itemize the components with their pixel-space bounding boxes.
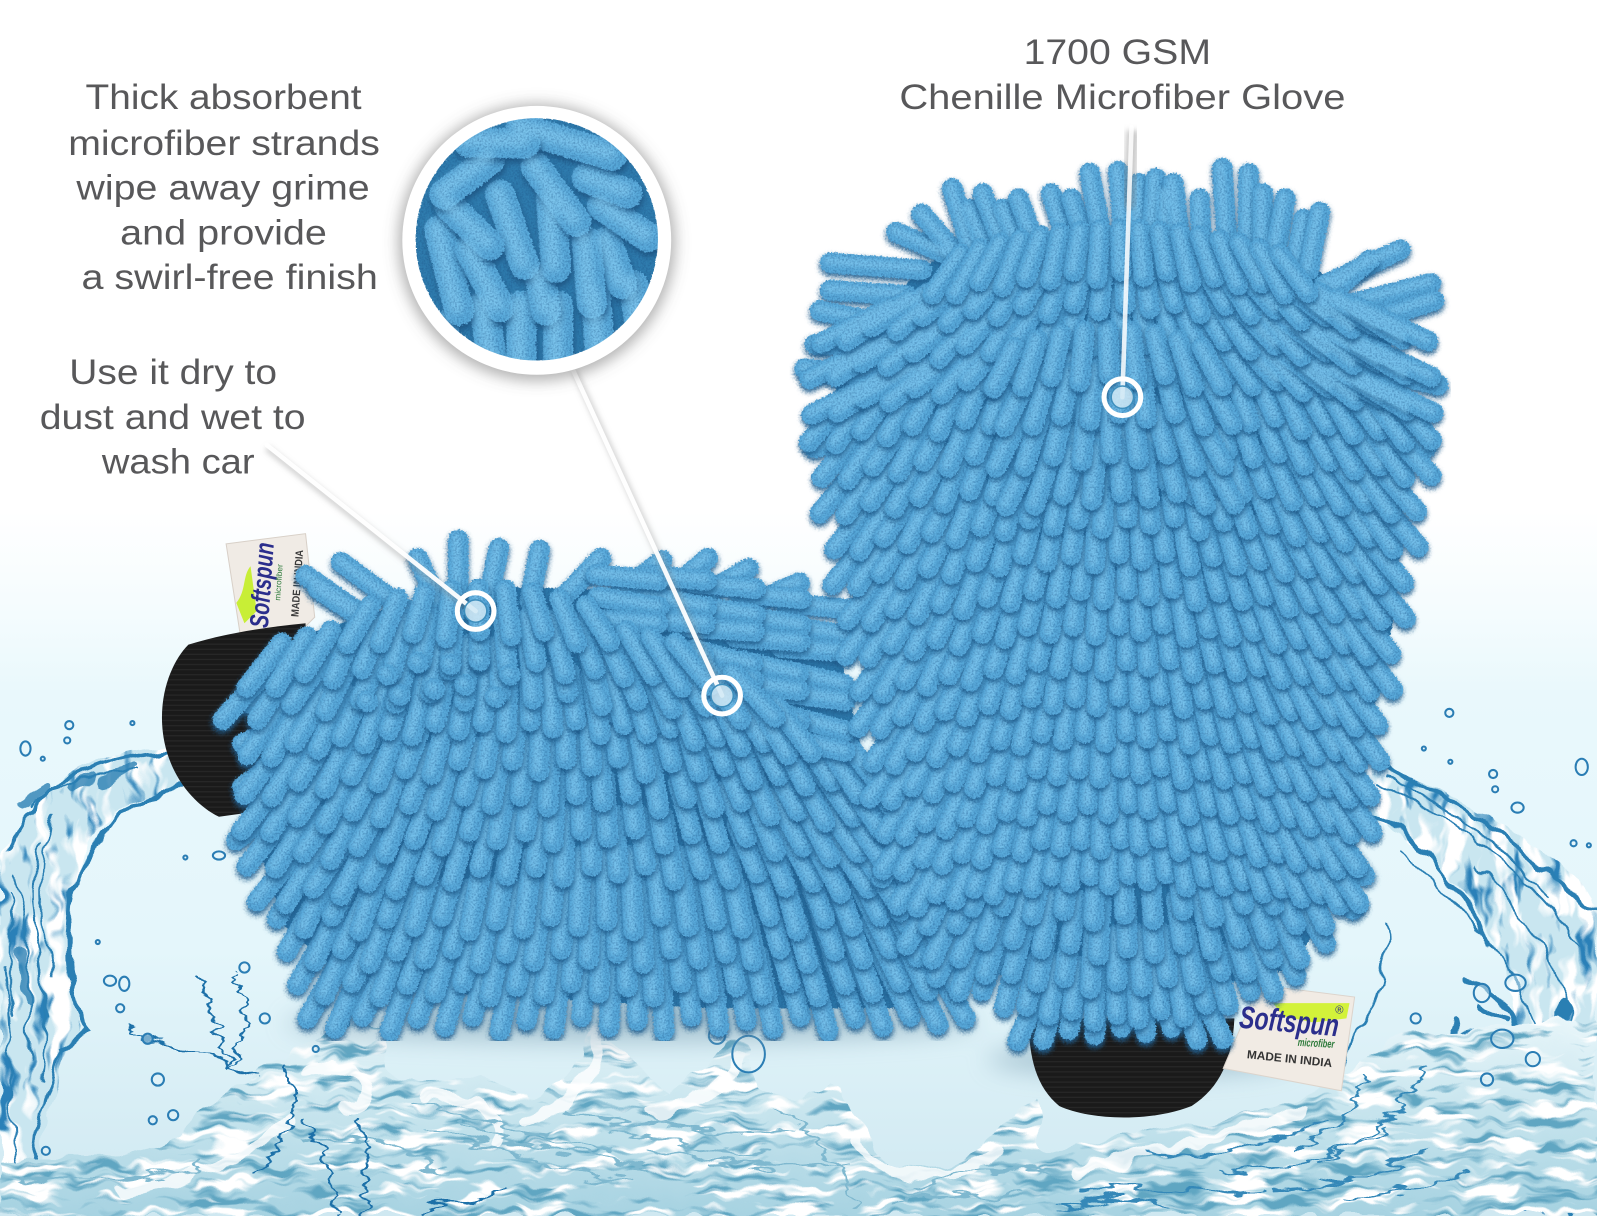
text: thick absorbent strands: Thick absorbent [86,77,362,117]
left black cuff [162,623,306,817]
title: 1700 GSM chenille glove: Chenille Microfiber Glove [899,77,1345,117]
text: dry and wet use: Use it dry to [69,352,277,392]
left product tag [226,534,315,635]
hotspot ring: upright glove [1104,379,1141,416]
bottom water surface [0,1018,1597,1216]
upright glove [803,166,1438,1117]
left product tag: Softspun [244,541,280,629]
water splash [0,709,1597,1216]
left product tag: microfiber [273,564,285,601]
text: thick absorbent strands: wipe away grime [75,168,370,208]
left water swoosh [0,745,181,1216]
right product tag [1223,985,1355,1091]
lying glove [162,534,966,1031]
right product tag: ® [1335,1004,1344,1016]
right product tag: MADE IN INDIA [1246,1048,1333,1070]
text: dry and wet use: wash car [101,442,255,482]
right product tag: microfiber [1297,1037,1335,1051]
water ripple lines [20,978,1467,1212]
leader line: dry or wet use [267,445,494,629]
text: thick absorbent strands: and provide [120,212,327,252]
right black cuff [1029,1018,1234,1117]
right glove strands [803,166,1438,1041]
magnified microfiber strands [416,118,658,372]
title: 1700 GSM chenille glove: 1700 GSM [1024,32,1211,72]
hotspot ring: lying glove left [457,593,494,629]
text: thick absorbent strands: a swirl-free finish [81,257,378,297]
leader line: glove title [1104,127,1141,416]
left product tag: MADE IN INDIA [289,549,306,617]
left glove strands [220,538,966,1031]
text: dry and wet use: dust and wet to [40,397,306,437]
title: 1700 GSM chenille glove [899,32,1345,117]
text: dry and wet use [40,352,306,482]
zoom lens callout [398,104,675,381]
text: thick absorbent strands [68,77,380,297]
hotspot ring: lying glove right [704,677,740,714]
right water swoosh [1334,754,1597,1216]
leader line: zoom lens [572,369,740,714]
text: thick absorbent strands: microfiber strands [68,123,380,163]
right product tag: Softspun [1238,999,1340,1043]
water droplets [20,709,1591,1155]
glove shadows [285,1005,1293,1075]
